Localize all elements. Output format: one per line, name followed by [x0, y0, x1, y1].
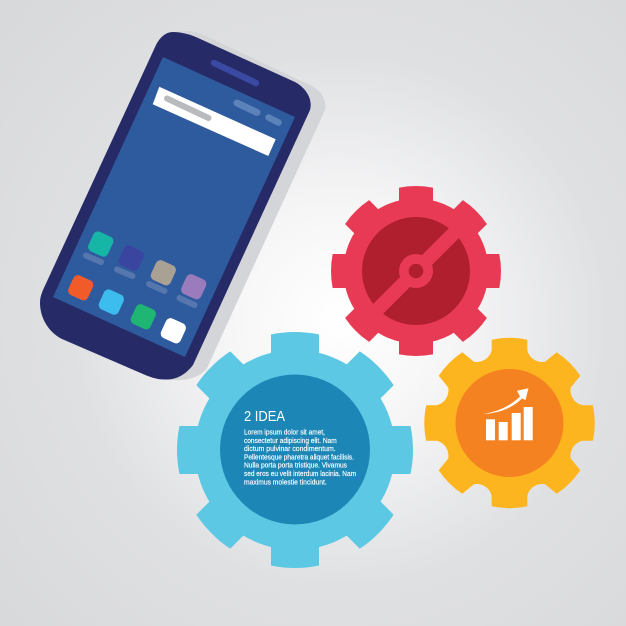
red gear body: [331, 186, 501, 356]
app icon: purple: [179, 273, 208, 301]
blue gear body: [177, 332, 413, 568]
red gear hole: [409, 264, 423, 278]
body text: sed eros eu velit interdum lacinia. Nam: [244, 469, 356, 478]
gear: red: [331, 186, 501, 356]
app icon: orange: [66, 274, 95, 302]
heading: 2 IDEA: [244, 409, 285, 425]
phone: [40, 32, 311, 380]
app label: [149, 284, 164, 291]
body text: [244, 428, 356, 486]
app icon: tan: [149, 259, 178, 287]
body text: Nulla porta porta tristique. Vivamus: [244, 461, 347, 470]
red gear inner disc: [362, 217, 470, 325]
red gear hub: [399, 254, 433, 288]
phone speaker: [214, 63, 256, 83]
status pill short: [268, 118, 278, 122]
icon: growth chart: [483, 388, 533, 440]
app label: [86, 256, 101, 262]
body text: Lorem ipsum dolor sit amet,: [244, 428, 325, 436]
app icon: teal: [86, 230, 115, 258]
app icon: sky: [97, 288, 126, 316]
app icon: white: [159, 317, 188, 345]
app icon: green: [129, 303, 158, 331]
gear: blue: [177, 332, 413, 568]
body text: consectetur adipiscing elit. Nam: [244, 436, 337, 445]
app label: [117, 270, 132, 276]
blue gear inner disc: [220, 374, 370, 524]
search bar text pill: [167, 98, 208, 118]
body text: dictum pulvinar condimentum.: [244, 444, 336, 453]
search bar: [153, 87, 276, 156]
app icon: indigo: [117, 244, 146, 272]
red gear diagonal spoke: [375, 230, 457, 312]
phone shadow: [170, 31, 325, 380]
gear: yellow: [424, 338, 595, 508]
status pill long: [237, 103, 257, 112]
yellow gear body: [424, 338, 595, 508]
orange inner disc: [456, 369, 564, 477]
phone screen: [53, 57, 295, 357]
app label: [180, 298, 194, 305]
body text: Pellentesque pharetra aliquet facilisis.: [244, 452, 354, 461]
phone body: [40, 32, 311, 380]
body text: maximus molestie tincidunt.: [244, 477, 327, 486]
